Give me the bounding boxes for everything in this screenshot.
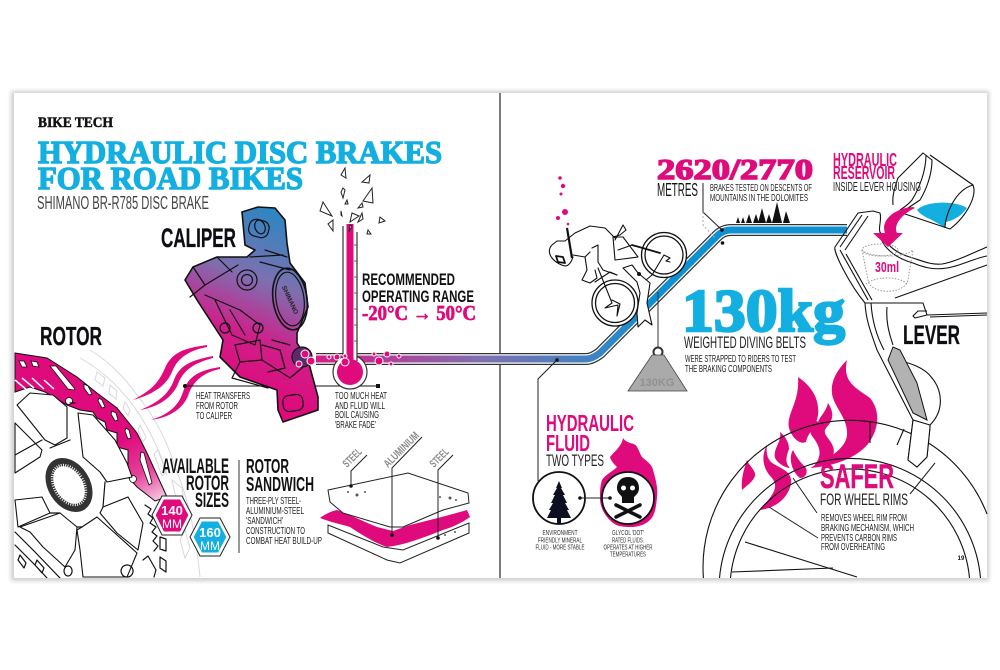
diving belts label: WEIGHTED DIVING BELTS [684, 333, 806, 352]
lever tip over wheel [908, 420, 930, 467]
subtitle: SHIMANO BR-R785 DISC BRAKE [37, 193, 209, 213]
rotor illustration [15, 350, 200, 578]
title [38, 134, 442, 196]
dot fluid caption: GLYCOL 'DOT' [612, 528, 644, 537]
available rotor sizes: AVAILABLE [162, 455, 229, 478]
available rotor sizes: SIZES [195, 489, 229, 512]
rotor lower teeth and holes [15, 403, 166, 578]
caliper logo: SHIMANO [280, 285, 299, 316]
hydraulic reservoir heading: HYDRAULIC [833, 150, 897, 170]
operating range text [362, 270, 474, 306]
heat caption: TO CALIPER [196, 410, 232, 422]
operating range text: RECOMMENDED [362, 270, 455, 289]
treeline [736, 202, 790, 223]
rider illustration [549, 176, 686, 327]
rotor hub [45, 458, 92, 512]
mineral fluid caption: FRIENDLY MINERAL [538, 535, 582, 544]
caliper detail lines [190, 218, 312, 412]
brake fade caption [335, 390, 387, 431]
rotor sandwich heading: SANDWICH [246, 474, 314, 496]
safer caption: BRAKING MECHANISM, WHICH [821, 522, 914, 534]
safer heading: SAFER [820, 458, 894, 496]
diving belts caption: THE BRAKING COMPONENTS [685, 363, 772, 375]
brake fade caption: AND FLUID WILL [335, 400, 385, 412]
bubbles [556, 176, 569, 225]
2620/2770 figure: 2620/2770 [657, 154, 813, 186]
140mm hexagon: 140 [161, 503, 183, 518]
diving belts caption [685, 353, 796, 375]
lever illustration [835, 211, 987, 467]
160mm hexagon: 160 [199, 525, 221, 540]
safer leaders [769, 463, 935, 538]
hydraulic fluid heading: FLUID [546, 430, 590, 456]
shattered glass [320, 168, 385, 234]
bubbles in pipe [296, 350, 401, 367]
liquid [917, 203, 967, 228]
rotor sandwich text: CONSTRUCTION TO [246, 525, 305, 537]
diving weight [628, 292, 687, 391]
tree icon [533, 472, 585, 524]
fluid connector [578, 496, 612, 500]
aluminium label: ALUMINIUM [382, 430, 422, 470]
140mm hexagon [152, 496, 192, 535]
safer caption: REMOVES WHEEL RIM FROM [821, 512, 907, 524]
lever grey blade [888, 347, 927, 420]
hydraulic reservoir heading: RESERVOIR [833, 163, 895, 183]
dot fluid caption [604, 528, 653, 559]
bike wheels [592, 232, 686, 326]
fluid beaker [893, 153, 974, 229]
belt strap [623, 265, 652, 327]
brake fade caption: BOIL CAUSING [335, 409, 379, 421]
lever heading: LEVER [903, 320, 960, 350]
title: HYDRAULIC DISC BRAKES [38, 134, 442, 170]
rotor heading: ROTOR [40, 321, 102, 351]
diving belts caption: WERE STRAPPED TO RIDERS TO TEST [685, 353, 796, 365]
rotor sandwich text [246, 495, 322, 547]
rotor sandwich text: COMBAT HEAT BUILD-UP [246, 535, 322, 547]
rotor sandwich text: ALUMINIUM-STEEL [246, 505, 304, 517]
title: FOR ROAD BIKES [38, 160, 303, 196]
ghost larger rotor [80, 350, 200, 577]
rotor sandwich text: THREE-PLY STEEL- [246, 495, 301, 507]
spine divider [499, 93, 501, 578]
sandwich leaders [351, 437, 453, 538]
safer caption [821, 512, 914, 553]
rotor band cut-outs [19, 361, 152, 485]
safer caption: FROM OVERHEATING [821, 541, 885, 553]
dolomites caption: MOUNTAINS IN THE DOLOMITES [710, 192, 808, 204]
pouring arrow [873, 207, 915, 247]
160mm hexagon: MM [200, 539, 220, 553]
fluid leader [538, 358, 559, 481]
two types: TWO TYPES [546, 451, 604, 470]
sandwich diagram [320, 430, 470, 563]
operating range text: OPERATING RANGE [362, 287, 474, 306]
dolomites caption [710, 182, 812, 204]
metres: METRES [657, 180, 698, 200]
steel label: STEEL [341, 446, 365, 470]
rotor band ribs [15, 378, 54, 390]
dotted reservoir [862, 244, 913, 291]
rotor sandwich text: 'SANDWICH' [246, 515, 283, 527]
brake fade caption: TOO MUCH HEAT [335, 390, 387, 402]
safer caption: PREVENTS CARBON RIMS [821, 532, 897, 544]
page number: 19 [958, 556, 965, 562]
dolomites caption: BRAKES TESTED ON DESCENTS OF [710, 182, 812, 194]
metres leader [703, 183, 724, 245]
160mm hexagon [190, 518, 230, 556]
hydraulic fluid heading [546, 410, 634, 456]
section label: BIKE TECH [38, 115, 114, 131]
temperature range: -20°C → 50°C [362, 301, 476, 325]
30ml: 30ml [875, 259, 899, 276]
140mm hexagon: MM [162, 517, 182, 531]
wheel [703, 420, 987, 578]
dot fluid caption: TEMPERATURES [610, 550, 646, 559]
steel label 2: STEEL [428, 446, 452, 470]
mineral fluid caption: FLUID - MORE STABLE [536, 542, 584, 551]
heat caption [196, 390, 250, 422]
rotor sandwich heading [246, 456, 314, 496]
130kg figure: 130kg [682, 278, 845, 344]
brake fade caption: 'BRAKE FADE' [335, 419, 376, 431]
dot fluid caption: RATED FLUIDS. [612, 535, 644, 544]
mineral fluid caption [536, 528, 584, 551]
hydraulic reservoir heading [833, 150, 897, 183]
leader: heat transfer [183, 384, 380, 388]
rotor windows [15, 393, 143, 577]
page shadow [11, 91, 989, 581]
hot magenta rotor band [15, 353, 167, 501]
heat waves [133, 345, 220, 420]
hydraulic fluid heading: HYDRAULIC [546, 410, 634, 436]
available rotor sizes: ROTOR [186, 472, 229, 495]
heat caption: FROM ROTOR [196, 400, 238, 412]
caliper heading: CALIPER [161, 223, 236, 253]
magazine spread page [14, 93, 987, 578]
heat caption: HEAT TRANSFERS [196, 390, 250, 402]
flames [742, 360, 877, 510]
caliper [185, 207, 318, 422]
dot fluid caption: OPERATES AT HIGHER [604, 542, 653, 551]
mineral fluid caption: ENVIRONMENT [542, 528, 578, 537]
rotor sandwich heading: ROTOR [246, 456, 289, 478]
thermometer [333, 224, 367, 389]
skull icon with flame [600, 438, 657, 527]
hydraulic pipe [316, 230, 847, 359]
reservoir subheading: INSIDE LEVER HOUSING [833, 179, 921, 194]
diving weight: 130KG [640, 377, 674, 389]
available rotor sizes [162, 455, 229, 512]
snorkel [567, 228, 572, 258]
bike frame and rider [549, 225, 670, 316]
safer subheading: FOR WHEEL RIMS [820, 490, 908, 509]
